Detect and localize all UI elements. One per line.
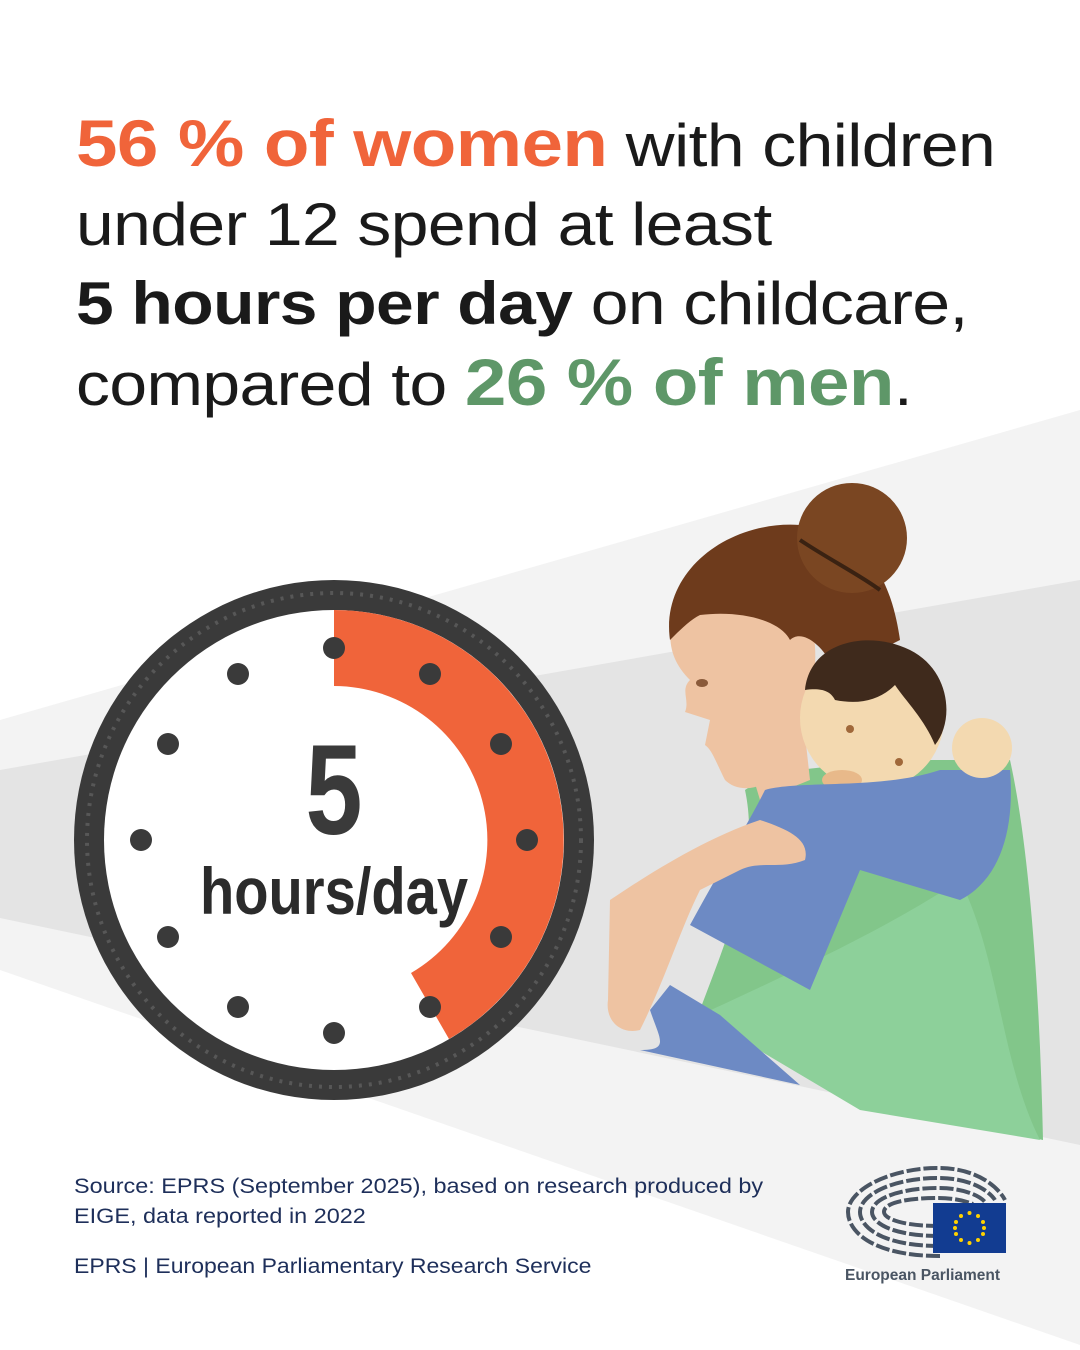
mother hair — [669, 525, 900, 670]
title — [76, 106, 995, 419]
baby head — [800, 646, 944, 790]
logo: European Parliament: European Parliament — [845, 1267, 1000, 1284]
mother neck & face — [730, 690, 810, 800]
title: compared to 26 % of men. — [76, 345, 912, 419]
footer credit: EPRS | European Parliamentary Research Service — [74, 1254, 591, 1278]
logo: European Parliament — [845, 1166, 1007, 1284]
clock icon: hours/day — [200, 855, 468, 928]
title: 56 % of women with children — [76, 106, 995, 180]
mother body green — [700, 760, 1043, 1140]
source text: Source: EPRS (September 2025), based on research produced by — [74, 1174, 763, 1198]
mother arm — [608, 820, 806, 1031]
source text — [74, 1174, 763, 1228]
baby body blue — [690, 770, 1011, 990]
title: under 12 spend at least — [76, 191, 772, 258]
clock icon: 5 — [306, 718, 362, 862]
orange arc — [334, 610, 564, 1039]
source text: EIGE, data reported in 2022 — [74, 1204, 366, 1228]
clock icon — [74, 580, 594, 1100]
title: 5 hours per day on childcare, — [76, 270, 968, 337]
